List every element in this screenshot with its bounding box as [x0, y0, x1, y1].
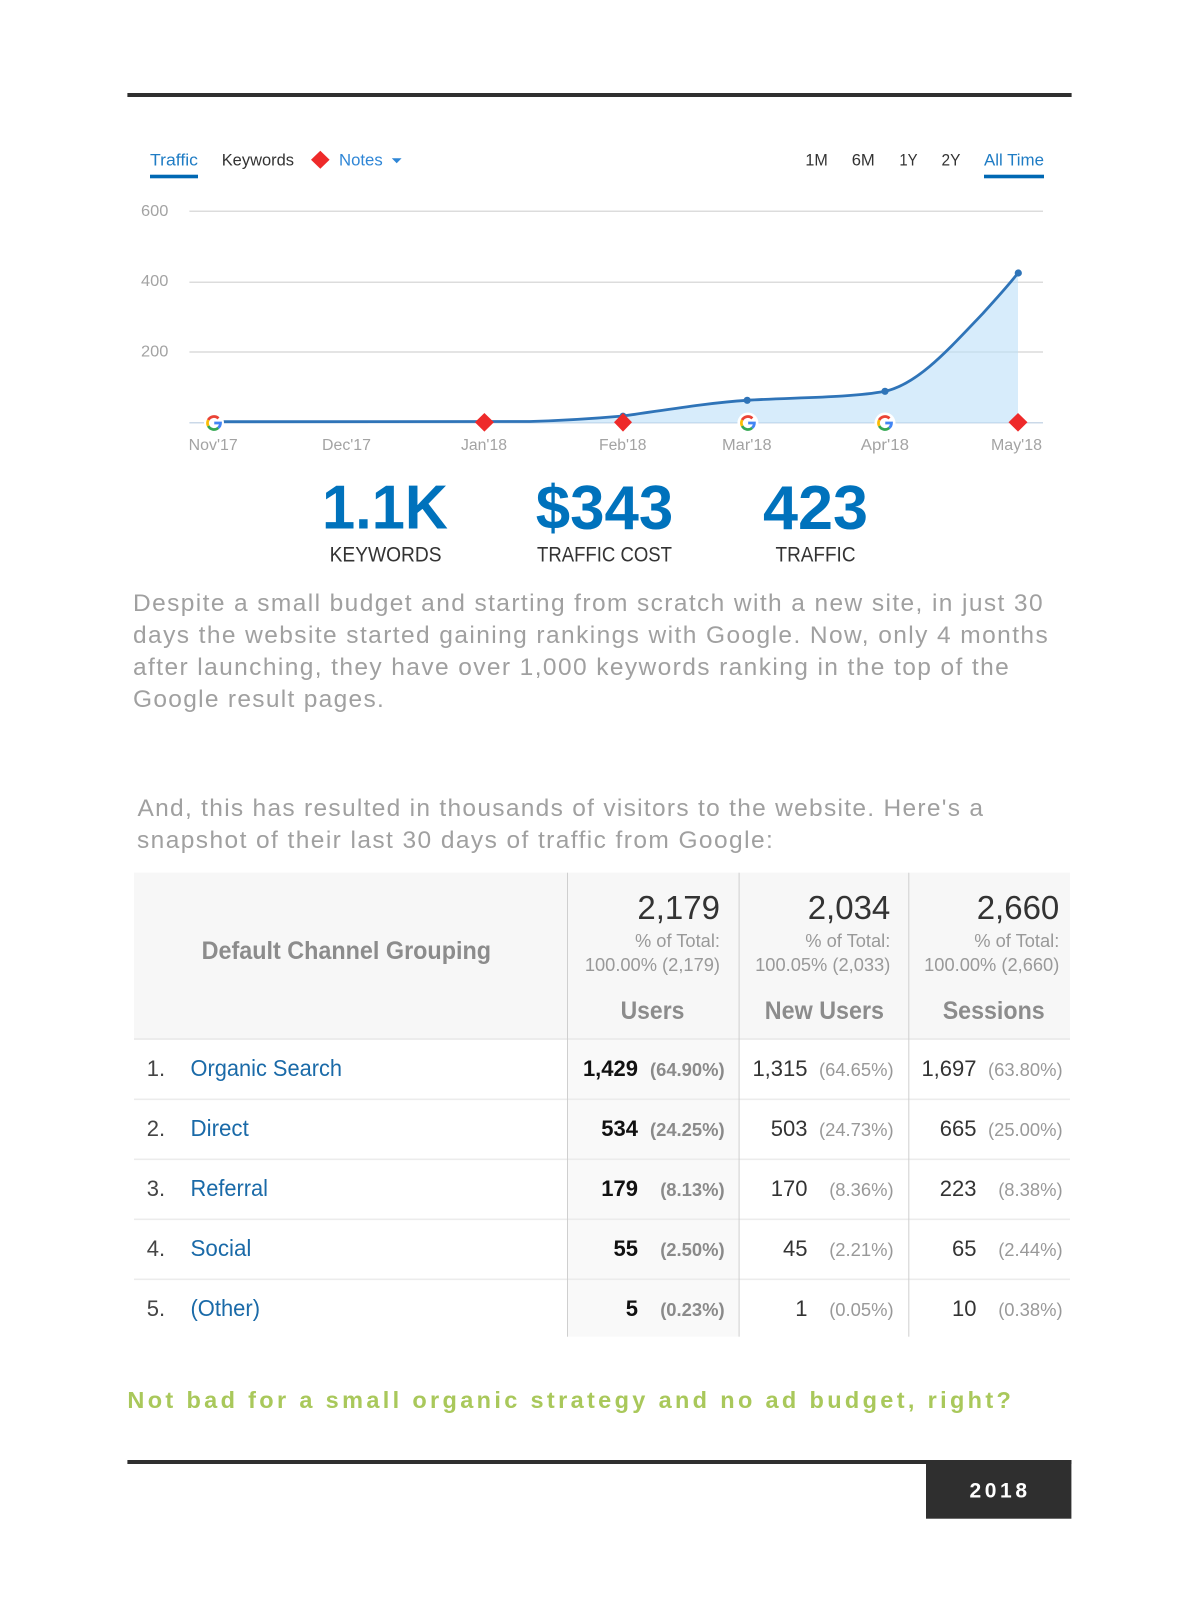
row: social: 65 — [952, 1236, 976, 1261]
row: social: 4. — [147, 1236, 165, 1261]
row: organic search: Organic Search — [190, 1055, 342, 1081]
data points — [620, 269, 1022, 419]
row: organic search: 1,429 — [583, 1056, 638, 1081]
row: other: (Other) — [190, 1295, 260, 1321]
row: referral: 3. — [147, 1176, 165, 1201]
row: direct: (25.00%) — [988, 1119, 1063, 1140]
row: social: Social — [190, 1235, 251, 1261]
row: other: 5 — [626, 1296, 638, 1321]
x axis labels — [189, 437, 1042, 454]
row: social — [147, 1235, 1063, 1261]
header: sessions: % of Total: — [974, 930, 1059, 951]
x axis labels: Nov'17 — [189, 437, 238, 454]
stat: traffic cost: $343 — [536, 474, 673, 543]
row: referral: 179 — [601, 1176, 638, 1201]
x axis labels: Feb'18 — [599, 437, 646, 454]
stat: keywords: KEYWORDS — [330, 544, 442, 566]
time range selector: 6M — [852, 150, 875, 170]
row: social: 55 — [614, 1236, 638, 1261]
time range selector: 1M — [805, 150, 828, 170]
row: referral: (8.36%) — [829, 1179, 894, 1200]
row: direct: (24.73%) — [819, 1119, 894, 1140]
chart tabs: Traffic — [150, 150, 199, 170]
row: social: 45 — [783, 1236, 808, 1261]
header: users: 100.00% (2,179) — [585, 954, 720, 975]
chart: traffic over time — [141, 150, 1044, 454]
header: sessions: Sessions — [943, 997, 1045, 1025]
row: social: (2.21%) — [829, 1239, 894, 1260]
row: organic search: (63.80%) — [988, 1059, 1063, 1080]
header: users: 2,179 — [637, 889, 720, 926]
header: new users — [755, 889, 890, 1025]
time range selector — [805, 150, 1044, 178]
header: users: Users — [621, 997, 684, 1025]
paragraph: rankings summary: Google result pages. — [133, 686, 384, 713]
row: other: (0.23%) — [660, 1299, 725, 1320]
row: organic search: 1,315 — [752, 1056, 808, 1081]
stat: traffic: 423 — [763, 474, 868, 543]
row: organic search: 1. — [147, 1056, 165, 1081]
row: direct: 2. — [147, 1116, 165, 1141]
stat: traffic: TRAFFIC — [776, 544, 856, 566]
bottom rule — [127, 1460, 1071, 1464]
y axis labels: 200 — [141, 344, 169, 361]
header: new users: 2,034 — [808, 889, 890, 926]
y axis labels — [141, 203, 169, 361]
row: referral — [147, 1175, 1063, 1201]
closing statement: Not bad for a small organic strategy and no ad budget, right? — [127, 1387, 1011, 1413]
row: other: 5. — [147, 1296, 165, 1321]
x axis labels: Mar'18 — [722, 437, 772, 454]
x axis labels: May'18 — [991, 437, 1042, 454]
row: referral: 170 — [771, 1176, 808, 1201]
row: direct: 665 — [940, 1116, 976, 1141]
row: organic search — [147, 1055, 1063, 1081]
row: referral: (8.38%) — [998, 1179, 1063, 1200]
row: other: (0.38%) — [998, 1299, 1063, 1320]
y axis labels: 400 — [141, 273, 169, 290]
row: direct: 534 — [601, 1116, 639, 1141]
row: direct: Direct — [190, 1115, 249, 1141]
traffic line — [214, 273, 1018, 422]
paragraph: visitors intro: And, this has resulted in thousands of visitors to the website. Here's a — [138, 795, 983, 822]
row: other: (0.05%) — [829, 1299, 894, 1320]
x axis labels: Dec'17 — [322, 437, 371, 454]
header: channel grouping: Default Channel Grouping — [202, 937, 491, 965]
time range selector: 1Y — [899, 150, 918, 170]
row: organic search: 1,697 — [921, 1056, 976, 1081]
header: new users: % of Total: — [805, 930, 890, 951]
time range selector: All Time — [984, 150, 1044, 170]
row: other: 10 — [952, 1296, 976, 1321]
header: new users: New Users — [765, 997, 884, 1025]
stat: keywords: 1.1K — [322, 473, 448, 542]
paragraph: rankings summary — [133, 590, 1048, 713]
x axis labels: Apr'18 — [861, 437, 909, 454]
time range selector: 2Y — [942, 150, 960, 170]
row: organic search: (64.65%) — [819, 1059, 894, 1080]
paragraph: rankings summary: days the website started gaining rankings with Google. Now, only 4 months — [133, 622, 1048, 649]
header: sessions: 100.00% (2,660) — [924, 954, 1059, 975]
chart tabs: Notes — [339, 150, 383, 170]
row: social: (2.50%) — [660, 1239, 725, 1260]
row: other — [147, 1295, 1063, 1321]
note diamonds — [475, 413, 1027, 432]
chart tabs — [150, 150, 402, 178]
paragraph: rankings summary: Despite a small budget and starting from scratch with a new site, in just 30 — [133, 590, 1043, 617]
header: sessions: 2,660 — [977, 889, 1059, 926]
google update icons — [204, 412, 896, 434]
year badge — [926, 1460, 1071, 1519]
table: analytics channels — [134, 873, 1070, 1337]
row: organic search: (64.90%) — [650, 1059, 725, 1080]
stat: traffic cost: TRAFFIC COST — [537, 544, 672, 566]
paragraph: visitors intro — [137, 795, 983, 854]
row: direct: (24.25%) — [650, 1119, 725, 1140]
top rule — [127, 93, 1072, 97]
row: other: 1 — [795, 1296, 808, 1321]
y axis labels: 600 — [141, 203, 169, 220]
paragraph: rankings summary: after launching, they have over 1,000 keywords ranking in the top of the — [133, 654, 1009, 681]
header: new users: 100.05% (2,033) — [755, 954, 890, 975]
paragraph: visitors intro: snapshot of their last 30 days of traffic from Google: — [137, 827, 773, 854]
table header background — [134, 873, 1070, 1038]
row: referral: 223 — [940, 1176, 976, 1201]
row: referral: (8.13%) — [660, 1179, 725, 1200]
row: social: (2.44%) — [998, 1239, 1063, 1260]
row: direct: 503 — [771, 1116, 808, 1141]
x axis labels: Jan'18 — [461, 437, 507, 454]
row: referral: Referral — [190, 1175, 268, 1201]
chart tabs: Keywords — [222, 150, 294, 170]
area under curve — [214, 273, 1018, 423]
row: direct — [147, 1115, 1063, 1141]
header: users — [585, 889, 720, 1025]
header: users: % of Total: — [635, 930, 720, 951]
year badge: 2018 — [970, 1479, 1027, 1502]
header: sessions — [924, 889, 1059, 1025]
